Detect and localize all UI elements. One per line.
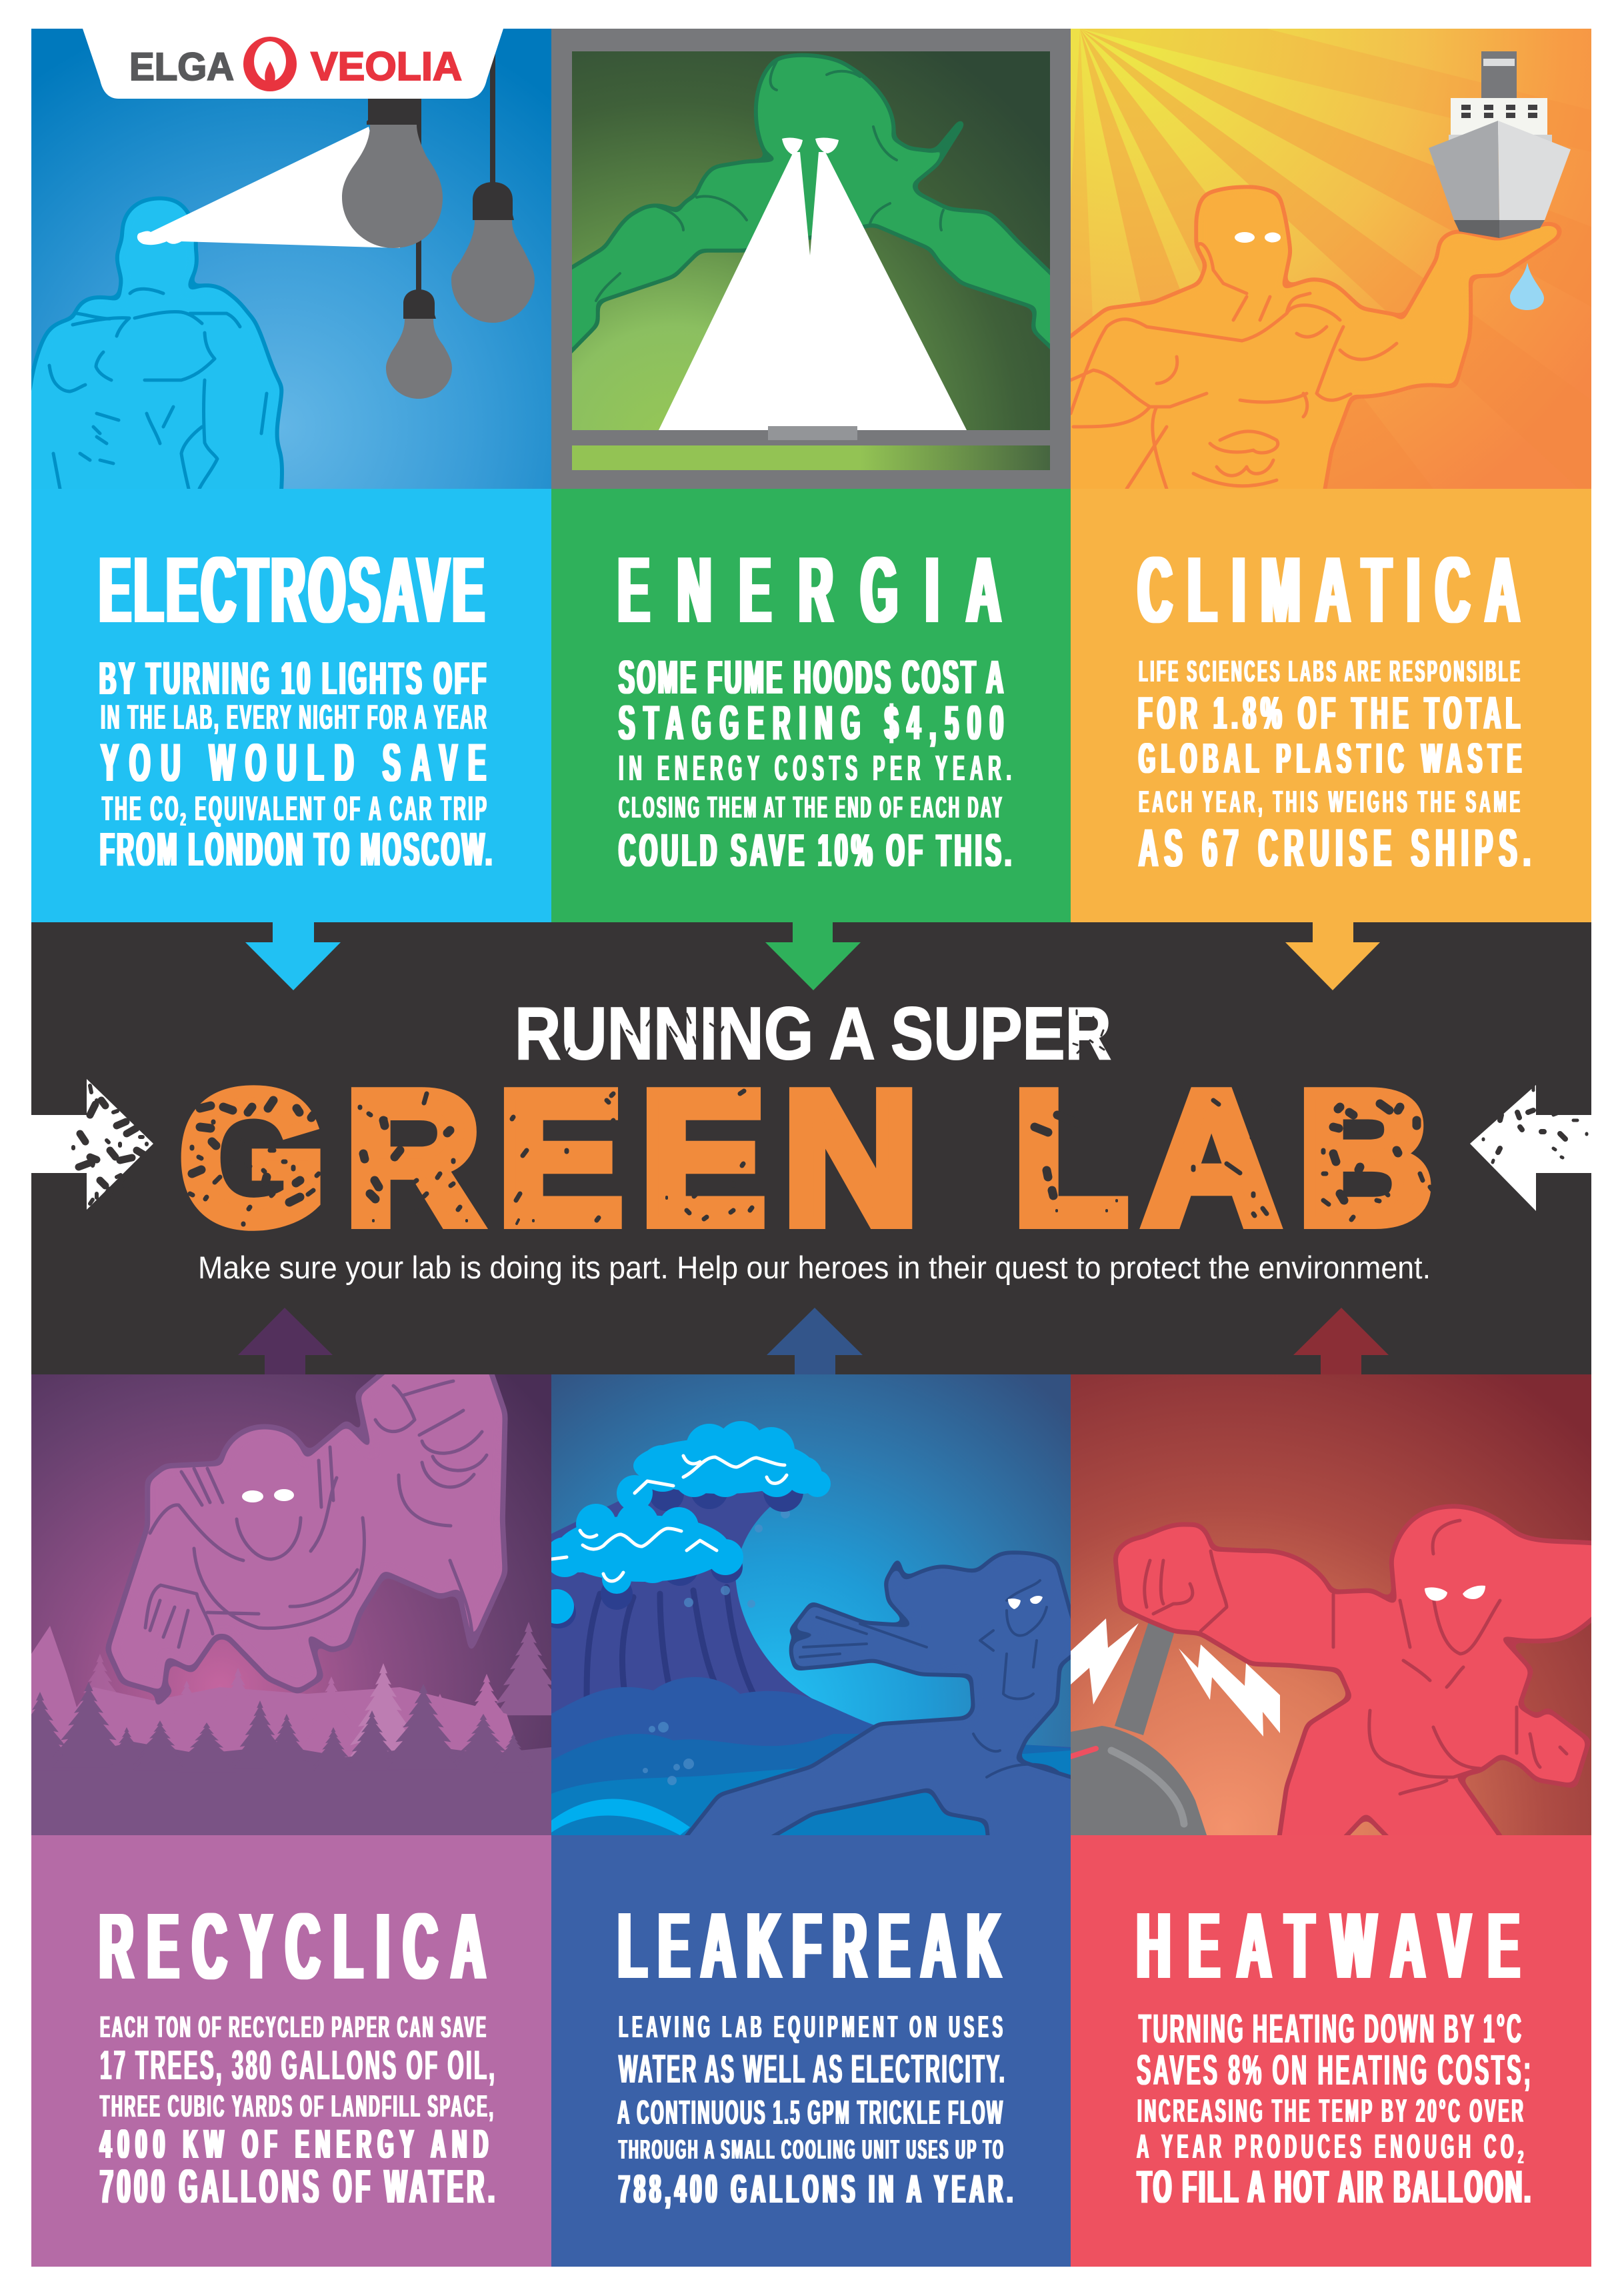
text block: Leakfreak copy: 788,400 GALLONS IN A YEAR. (619, 2167, 1013, 2212)
text block: Climatica copy: EACH YEAR, THIS WEIGHS THE SAME (1139, 784, 1520, 819)
text block: Leakfreak copy (617, 2009, 1013, 2212)
text block: Energia copy: CLOSING THEM AT THE END OF EACH DAY (619, 791, 1002, 824)
fume hood lower bar (572, 445, 1050, 470)
panel: Recyclica text (31, 1835, 551, 2267)
sun rays (1071, 29, 1591, 489)
panel: central title band (31, 922, 1591, 1374)
icon: left eye (1425, 1587, 1447, 1600)
wave mid layers (551, 1677, 1071, 1835)
panel: Leakfreak illustration (539, 1374, 1080, 1847)
icon: Veolia emblem (243, 37, 297, 91)
text block: Energia copy: STAGGERING $4,500 (619, 696, 1003, 750)
logo: Elga Veolia: VEOLIA (311, 44, 462, 89)
hero: Heatwave figure (1117, 1508, 1607, 1847)
panel: Leakfreak text (551, 1835, 1071, 2267)
text block: Heatwave copy (1137, 2007, 1531, 2213)
text block: Electrosave copy: BY TURNING 10 LIGHTS OFF (99, 652, 486, 704)
text block: Leakfreak copy: THROUGH A SMALL COOLING UNIT USES UP TO (619, 2134, 1003, 2165)
hero: Electrosave figure (13, 200, 280, 507)
arrow: Energia down (765, 922, 861, 990)
icon: beams of light from eyes (659, 152, 967, 430)
text block: Electrosave copy: EQUIVALENT OF A CAR TRIP (188, 789, 487, 828)
heading: Climatica: CLIMATICA (1138, 537, 1519, 642)
text block: Electrosave copy: FROM LONDON TO MOSCOW. (100, 822, 492, 876)
heading: Running a Super: RUNNING A SUPER (515, 992, 1111, 1075)
heading: Electrosave: ELECTROSAVE (99, 537, 484, 642)
text block: Heatwave copy: SAVES 8% ON HEATING COSTS; (1137, 2046, 1531, 2094)
icon: right eye (815, 138, 839, 153)
text block: Leakfreak copy: LEAVING LAB EQUIPMENT ON USES (619, 2009, 1003, 2044)
panel: Heatwave text (1071, 1835, 1591, 2267)
panel: Electrosave text (31, 489, 551, 922)
text block: Heatwave copy: 2 (1518, 2147, 1523, 2167)
arrow: Electrosave down (245, 922, 341, 990)
text block: Climatica copy (1138, 655, 1531, 878)
hero: Leakfreak figure (680, 1554, 1080, 1847)
icon: right eye (1265, 232, 1281, 243)
text block: Electrosave copy: THE CO (102, 789, 178, 828)
text block: Recyclica copy (100, 2011, 495, 2213)
hero: Recyclica figure (110, 1367, 503, 1697)
text block: Recyclica copy: THREE CUBIC YARDS OF LANDFILL SPACE, (100, 2089, 493, 2123)
icon: left eye (1235, 232, 1255, 243)
icon: left eye (1008, 1598, 1021, 1609)
icon: large light bulb (342, 99, 443, 248)
text block: Recyclica copy: 7000 GALLONS OF WATER. (100, 2159, 495, 2213)
hero: Energia figure (560, 57, 1063, 360)
icon: upper foam crest (617, 1421, 831, 1512)
panel: Energia text (551, 489, 1071, 922)
icon: cord for middle bulb (490, 53, 495, 183)
text block: Climatica copy: FOR 1.8% OF THE TOTAL (1138, 687, 1520, 739)
arrow: white distressed right-pointing (31, 1079, 153, 1210)
arrow: Heatwave up (1293, 1308, 1389, 1374)
arrow: Recyclica up (238, 1308, 333, 1374)
arrow: white distressed left-pointing (1470, 1084, 1591, 1211)
text block: Energia copy: COULD SAVE 10% OF THIS. (619, 824, 1011, 876)
panel: Heatwave illustration (1060, 1374, 1607, 1847)
foreground treeline (7, 1682, 551, 1835)
icon: water drop (1510, 263, 1544, 310)
wave strands (587, 1587, 753, 1727)
text block: Electrosave copy: IN THE LAB, EVERY NIGHT FOR A YEAR (101, 698, 487, 736)
icon: lever base (1060, 1622, 1211, 1847)
text block: Leakfreak copy: WATER AS WELL AS ELECTRICITY. (619, 2047, 1005, 2092)
far right tree (495, 1622, 562, 1715)
text block: Heatwave copy: TURNING HEATING DOWN BY 1°C (1139, 2007, 1521, 2052)
heading: Green Lab: GREEN LAB (179, 1052, 1433, 1263)
panel: Recyclica illustration (7, 1367, 562, 1835)
text block: Recyclica copy: 17 TREES, 380 GALLONS OF OIL, (100, 2042, 495, 2089)
text block: Climatica copy: AS 67 CRUISE SHIPS. (1139, 818, 1531, 878)
text block: Energia copy: IN ENERGY COSTS PER YEAR. (619, 748, 1011, 789)
panel: Climatica illustration (1060, 29, 1591, 507)
icon: middle light bulb (451, 182, 535, 323)
text block: Heatwave copy: TO FILL A HOT AIR BALLOON. (1137, 2161, 1531, 2213)
icon: lightning bolt right (1179, 1644, 1280, 1737)
text block: Electrosave copy (99, 652, 492, 876)
wave bubbles (617, 1509, 790, 1785)
arrow: Leakfreak up (767, 1308, 863, 1374)
text block: Leakfreak copy: A CONTINUOUS 1.5 GPM TRICKLE FLOW (617, 2093, 1003, 2131)
text block: subtitle: Make sure your lab is doing its part. Help our heroes in their quest to protect the environment. (198, 1250, 1431, 1285)
heading: Recyclica: RECYCLICA (99, 1893, 485, 1999)
icon: right eye (1463, 1586, 1485, 1599)
icon: small light bulb (386, 289, 452, 399)
icon: lower foam crest (539, 1502, 743, 1628)
arrow: Climatica down (1285, 922, 1380, 990)
logo: Elga Veolia (83, 29, 503, 99)
heading: Leakfreak: LEAKFREAK (618, 1893, 1001, 1998)
icon: cord for small bulb (416, 125, 421, 289)
icon: right eye (274, 1489, 294, 1501)
text block: Recyclica copy: EACH TON OF RECYCLED PAPER CAN SAVE (100, 2011, 486, 2044)
panel: Electrosave illustration (13, 29, 551, 507)
panel: Energia illustration (551, 29, 1071, 489)
light wave arc (551, 1799, 690, 1835)
text block: Electrosave copy: YOU WOULD SAVE (101, 732, 486, 793)
heading: Energia: ENERGIA (618, 537, 1001, 642)
icon: left eye (782, 138, 803, 155)
fume hood sash handle (768, 426, 857, 440)
icon: left eye (242, 1490, 263, 1502)
text block: Electrosave copy: 2 (181, 809, 186, 830)
panel: Climatica text (1071, 489, 1591, 922)
icon: beam of light from hero's eyes (137, 127, 400, 248)
text block: Energia copy (619, 650, 1011, 876)
icon: lightning bolt left (1071, 1618, 1139, 1704)
logo: Elga Veolia: ELGA (129, 45, 234, 89)
wave body (551, 1484, 880, 1747)
text block: Climatica copy: GLOBAL PLASTIC WASTE (1139, 734, 1521, 782)
text block: Heatwave copy: INCREASING THE TEMP BY 20°C OVER (1137, 2093, 1523, 2129)
heading: Heatwave: HEATWAVE (1137, 1893, 1519, 1998)
hero: Climatica figure (1060, 189, 1559, 507)
text block: Heatwave copy: A YEAR PRODUCES ENOUGH CO (1137, 2127, 1514, 2165)
icon: cruise ship (1429, 51, 1571, 238)
text block: Climatica copy: LIFE SCIENCES LABS ARE RESPONSIBLE (1139, 655, 1520, 688)
text block: Recyclica copy: 4000 KW OF ENERGY AND (100, 2122, 488, 2167)
text block: Energia copy: SOME FUME HOODS COST A (619, 650, 1003, 704)
fume hood window (560, 51, 1063, 430)
icon: right eye (1030, 1596, 1043, 1604)
mid treeline (31, 1626, 527, 1781)
